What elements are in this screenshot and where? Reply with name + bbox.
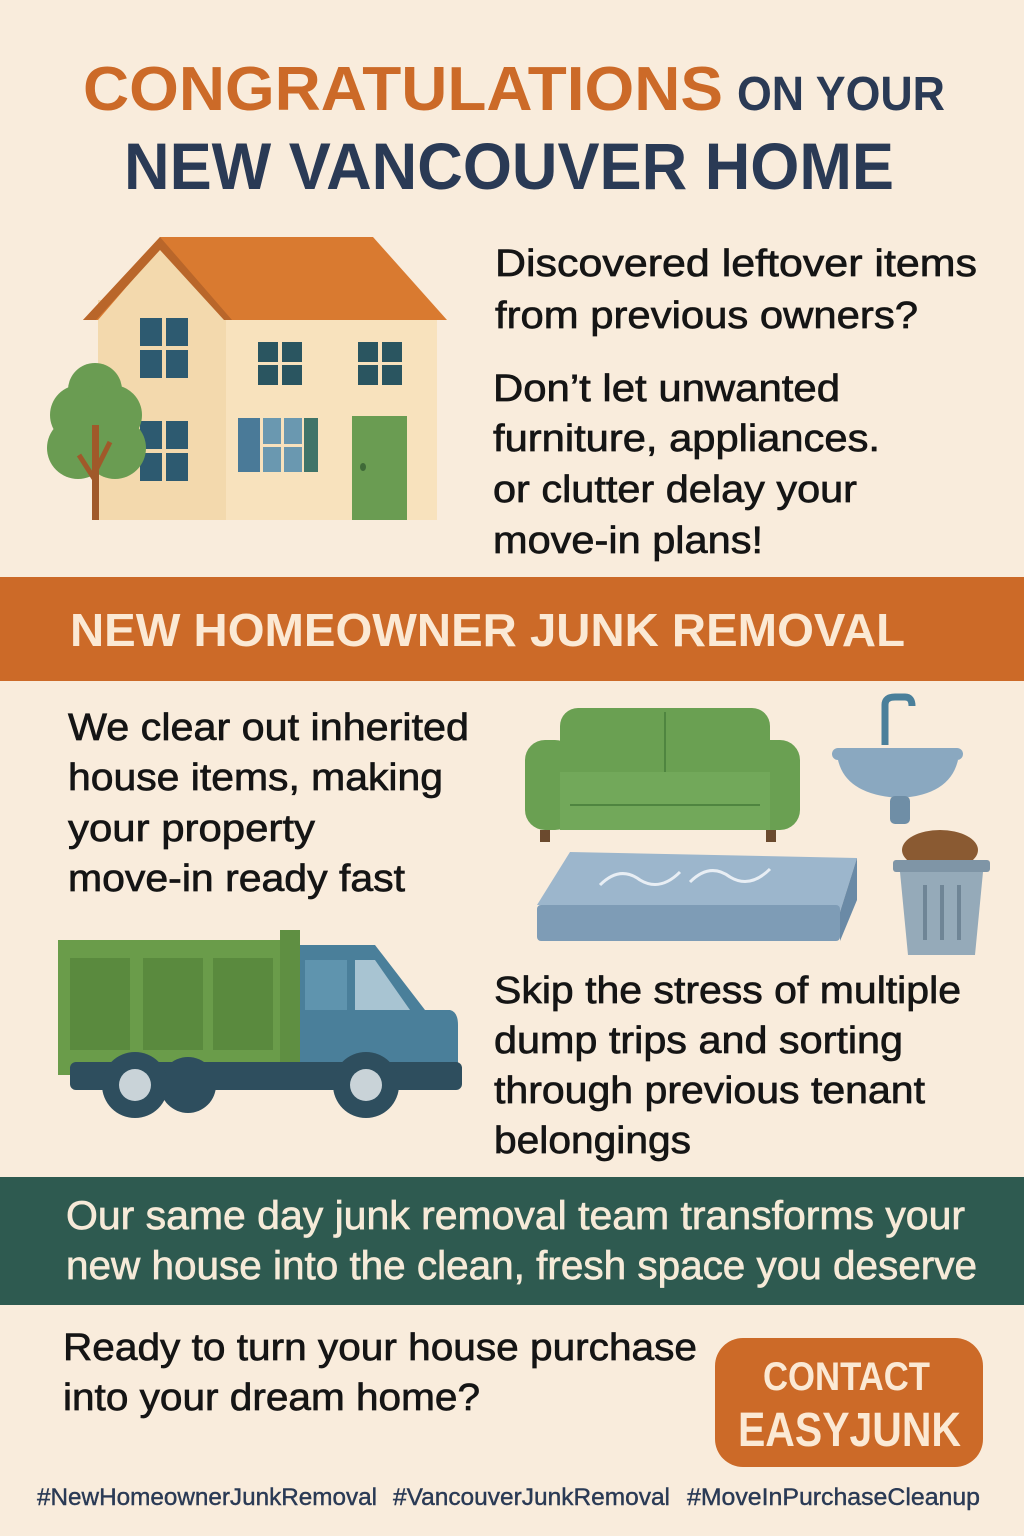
text: ready to turn: into your dream home?	[63, 1377, 480, 1419]
text: we clear out	[68, 707, 469, 900]
button: contact easyjunk: EASYJUNK	[738, 1404, 961, 1457]
icon: mattress	[537, 852, 857, 941]
icon: truck	[58, 930, 462, 1118]
banner: same day team: new house into the clean, fresh space you deserve	[66, 1244, 977, 1288]
icon: tree	[47, 363, 146, 520]
text: intro question: or clutter delay your	[493, 469, 857, 511]
title: NEW VANCOUVER HOME	[124, 129, 894, 203]
text: intro question: Discovered leftover items	[495, 243, 977, 285]
icon: trash can	[893, 830, 990, 955]
icon: sofa	[525, 708, 800, 842]
hashtags: #MoveInPurchaseCleanup	[687, 1484, 980, 1511]
title: CONGRATULATIONS	[83, 55, 723, 124]
text: we clear out: house items, making	[68, 757, 443, 799]
text: skip the stress: belongings	[494, 1120, 691, 1162]
hashtags: #NewHomeownerJunkRemoval	[37, 1484, 377, 1511]
text: intro question: from previous owners?	[495, 295, 918, 337]
text: skip the stress: Skip the stress of multiple	[494, 970, 961, 1012]
button: contact easyjunk	[715, 1338, 983, 1467]
text: intro question: furniture, appliances.	[493, 418, 880, 460]
hashtags: #VancouverJunkRemoval	[393, 1484, 670, 1511]
button: contact easyjunk: CONTACT	[763, 1355, 930, 1399]
hashtags	[37, 1484, 980, 1511]
banner: same day team	[0, 1177, 1024, 1305]
text: we clear out: your property	[68, 808, 315, 850]
text: ready to turn: Ready to turn your house purchase	[63, 1327, 697, 1369]
text: we clear out: We clear out inherited	[68, 707, 469, 749]
title: ON YOUR	[737, 68, 945, 121]
icon: sink	[832, 697, 963, 824]
text: ready to turn	[63, 1327, 697, 1419]
banner: new homeowner junk removal: NEW HOMEOWNER JUNK REMOVAL	[70, 604, 905, 656]
banner: new homeowner junk removal	[0, 577, 1024, 681]
text: intro question: Don’t let unwanted	[493, 368, 840, 410]
text: skip the stress: dump trips and sorting	[494, 1020, 903, 1062]
text: skip the stress	[494, 970, 961, 1162]
banner: same day team: Our same day junk removal team transforms your	[66, 1194, 965, 1238]
text: intro question: move-in plans!	[493, 520, 763, 562]
text: we clear out: move-in ready fast	[68, 858, 405, 900]
icon: house	[83, 237, 447, 520]
text: intro question	[493, 243, 977, 562]
title	[83, 55, 945, 203]
text: skip the stress: through previous tenant	[494, 1070, 925, 1112]
